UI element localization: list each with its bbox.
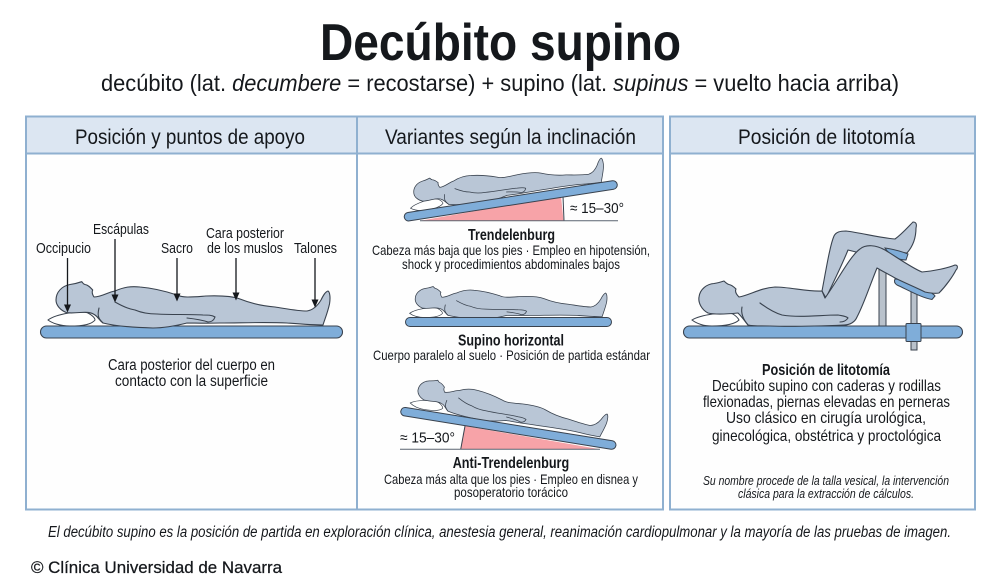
note: origin of the name [703, 474, 949, 501]
figure: lithotomy position [684, 222, 962, 350]
text: trendelenburg: Trendelenburg [468, 227, 555, 244]
title: Decúbito supino [320, 14, 681, 72]
figure: anti-trendelenburg [400, 377, 612, 449]
angle label: ≈ 15–30° [400, 430, 455, 447]
text: lithotomy description: Decúbito supino con caderas y rodillas [712, 378, 941, 395]
caption: contact surface [108, 357, 275, 390]
panel: posición de litotomía [670, 116, 975, 510]
text: lithotomy description: Uso clásico en cirugía urológica, [726, 410, 926, 427]
label and arrow: cara posterior de los muslos: Cara posterior [206, 225, 284, 242]
panel: posición y puntos de apoyo [26, 116, 357, 510]
text: trendelenburg [372, 227, 650, 272]
text: supino horizontal [373, 333, 650, 363]
label and arrow: sacro [161, 240, 193, 298]
label and arrow: cara posterior de los muslos [206, 225, 284, 297]
text: supino horizontal: Cuerpo paralelo al suelo · Posición de partida estándar [373, 347, 650, 363]
text: trendelenburg: Cabeza más baja que los pies · Empleo en hipotensión, [372, 242, 650, 258]
caption: contact surface: contacto con la superficie [115, 373, 268, 390]
heading: variantes: Variantes según la inclinación [385, 125, 636, 149]
text: lithotomy description: ginecológica, obstétrica y proctológica [712, 428, 941, 445]
note: origin of the name: clásica para la extracción de cálculos. [738, 487, 914, 501]
figure: supino horizontal [406, 286, 612, 326]
angle label: ≈ 15–30° [570, 200, 624, 217]
text: lithotomy description: flexionadas, piernas elevadas en perneras [703, 394, 950, 411]
text: anti-trendelenburg [384, 455, 638, 500]
text: anti-trendelenburg: posoperatorio torácico [454, 484, 568, 500]
label and arrow: talones: Talones [294, 240, 337, 257]
label and arrow: occipucio: Occipucio [36, 240, 91, 257]
label and arrow: occipucio [36, 240, 91, 309]
figure: supine body on table [40, 282, 342, 338]
text: lithotomy description [703, 362, 950, 445]
heading: litotomía: Posición de litotomía [738, 125, 915, 149]
text: anti-trendelenburg: Cabeza más alta que los pies · Empleo en disnea y [384, 471, 638, 487]
caption: contact surface: Cara posterior del cuerpo en [108, 357, 275, 374]
label and arrow: escápulas: Escápulas [93, 221, 149, 238]
subtitle: decúbito (lat. decumbere = recostarse) + supino (lat. supinus = vuelto hacia arriba) [101, 70, 899, 96]
text: lithotomy description: Posición de litotomía [762, 362, 890, 379]
text: anti-trendelenburg: Anti-Trendelenburg [453, 455, 569, 472]
label and arrow: talones [294, 240, 337, 304]
heading: posición y puntos de apoyo: Posición y puntos de apoyo [75, 125, 305, 149]
label and arrow: sacro: Sacro [161, 240, 193, 257]
figure: trendelenburg [406, 152, 624, 221]
text: supino horizontal: Supino horizontal [458, 333, 564, 350]
label and arrow: escápulas [93, 221, 149, 299]
text: trendelenburg: shock y procedimientos abdominales bajos [402, 256, 620, 272]
credit: © Clínica Universidad de Navarra [31, 558, 283, 577]
panel: variantes según la inclinación [357, 116, 663, 510]
label and arrow: cara posterior de los muslos: de los muslos [207, 240, 283, 257]
note: origin of the name: Su nombre procede de la talla vesical, la intervención [703, 474, 949, 488]
